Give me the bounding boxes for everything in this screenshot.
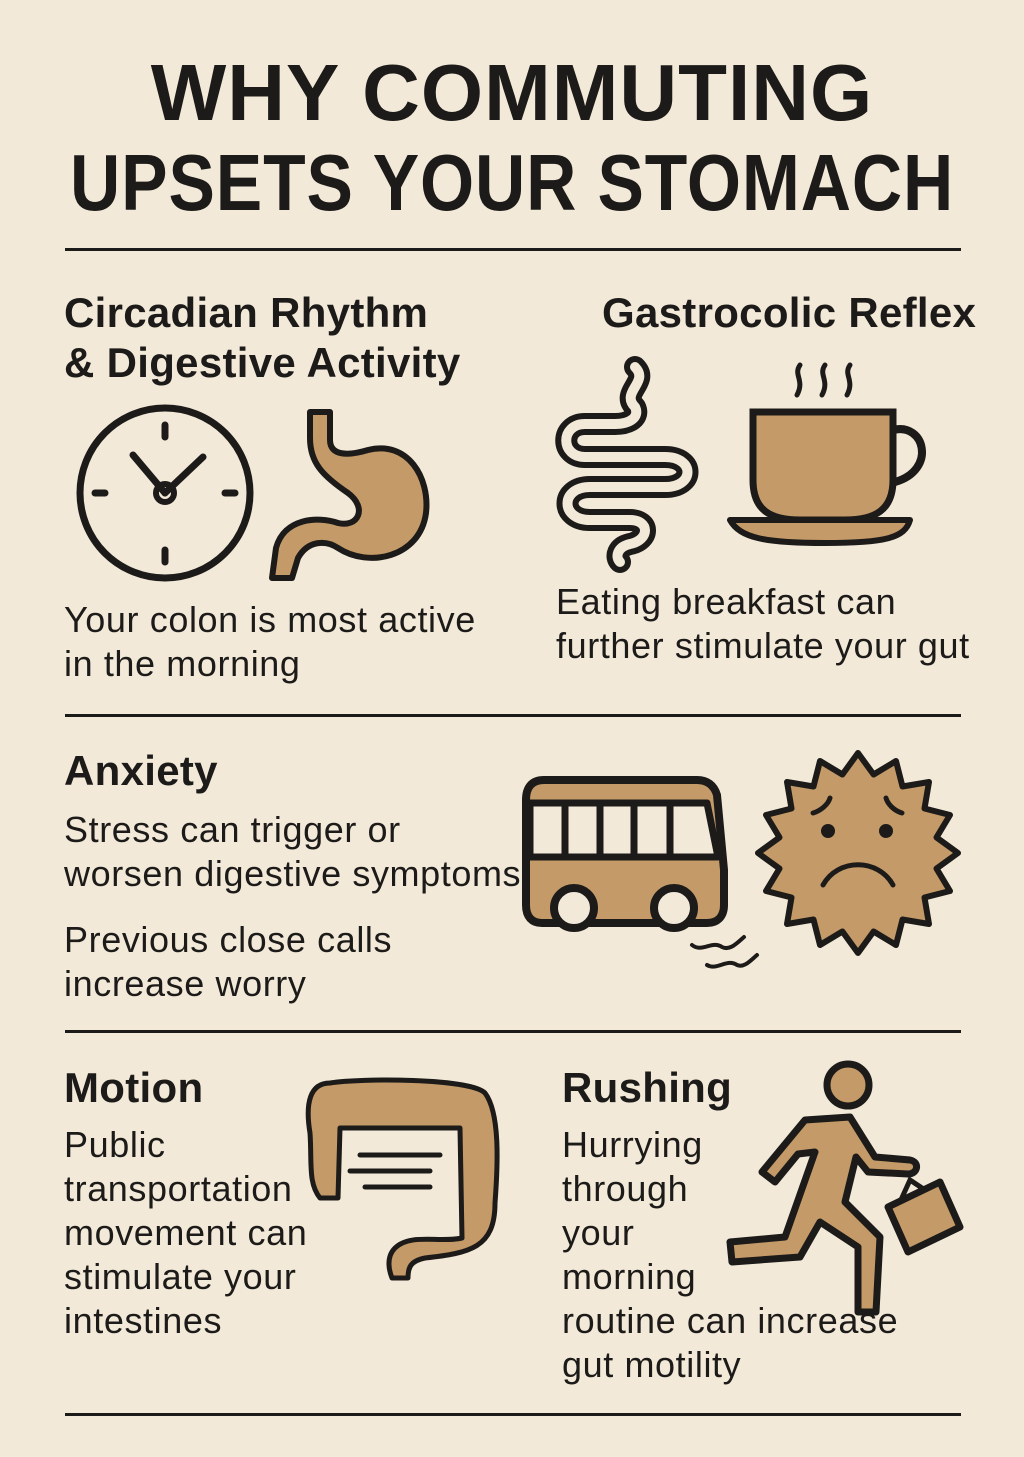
heading: motion: Motion xyxy=(64,1064,203,1111)
text: rushing: Hurrying xyxy=(562,1124,703,1165)
heading: gastrocolic: Gastrocolic Reflex xyxy=(602,289,976,336)
text: motion: stimulate your xyxy=(64,1256,296,1297)
icon: running man xyxy=(726,1060,964,1316)
title: WHY COMMUTING xyxy=(151,48,873,137)
heading: circadian xyxy=(64,289,461,386)
text: motion: transportation xyxy=(64,1168,293,1209)
text: motion xyxy=(64,1124,307,1341)
text: anxiety: increase worry xyxy=(64,963,306,1004)
icon: coffee cup xyxy=(727,362,926,546)
icon: bus xyxy=(522,776,760,969)
text: colon active xyxy=(64,599,476,684)
heading: circadian: & Digestive Activity xyxy=(64,339,461,386)
text: rushing xyxy=(562,1124,898,1385)
text: rushing: morning xyxy=(562,1256,696,1297)
text: anxiety: Stress can trigger or xyxy=(64,809,401,850)
icon: intestine xyxy=(555,356,698,573)
text: anxiety: worsen digestive symptoms Previous close calls xyxy=(64,853,521,960)
text: anxiety xyxy=(64,809,521,1004)
text: motion: intestines xyxy=(64,1300,222,1341)
text: rushing: routine can increase xyxy=(562,1300,898,1341)
text: colon active: in the morning xyxy=(64,643,301,684)
icon: colon xyxy=(306,1078,500,1280)
heading: anxiety: Anxiety xyxy=(64,747,218,794)
text: breakfast: further stimulate your gut xyxy=(556,625,970,666)
title xyxy=(70,48,954,227)
heading: rushing: Rushing xyxy=(562,1064,732,1111)
heading: circadian: Circadian Rhythm xyxy=(64,289,428,336)
text: rushing: through xyxy=(562,1168,688,1209)
title: UPSETS YOUR STOMACH xyxy=(70,138,954,227)
text: breakfast: Eating breakfast can xyxy=(556,581,896,622)
icon: clock xyxy=(76,404,254,582)
text: motion: movement can xyxy=(64,1212,307,1253)
icon: stomach xyxy=(269,409,430,581)
text: motion: Public xyxy=(64,1124,166,1165)
icon: worried face xyxy=(755,750,961,956)
text: colon active: Your colon is most active xyxy=(64,599,476,640)
text: breakfast xyxy=(556,581,970,666)
text: rushing: gut motility xyxy=(562,1344,741,1385)
text: rushing: your xyxy=(562,1212,634,1253)
